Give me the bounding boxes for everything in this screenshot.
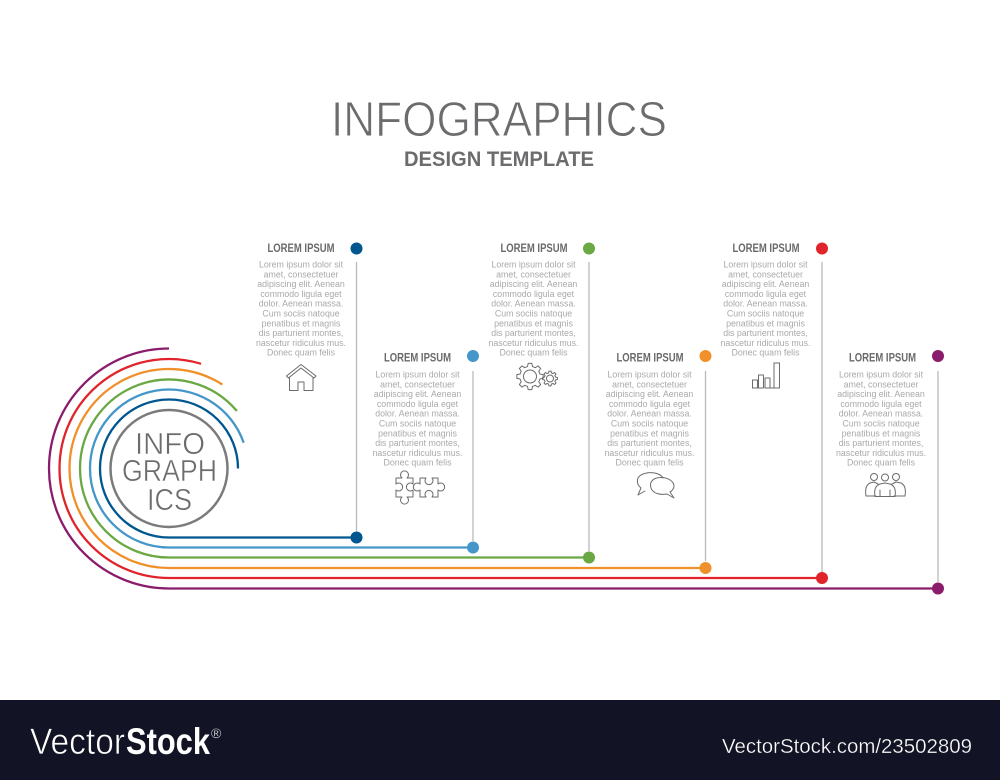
body text: Cum sociis natoque <box>379 418 456 428</box>
body text: amet, consectetuer <box>612 379 687 389</box>
body text: Donec quam felis <box>267 348 336 358</box>
connector <box>472 371 474 541</box>
heading: LOREM IPSUM <box>384 352 451 364</box>
body text: amet, consectetuer <box>496 269 571 279</box>
body text: commodo ligula eget <box>377 399 459 409</box>
marker bottom <box>700 562 712 574</box>
step 1 <box>256 242 362 544</box>
heading: LOREM IPSUM <box>849 352 916 364</box>
body text: commodo ligula eget <box>609 399 691 409</box>
body text: dolor. Aenean massa. <box>491 299 576 309</box>
body text: Lorem ipsum dolor sit <box>839 370 924 380</box>
connector <box>937 371 939 582</box>
body text: dolor. Aenean massa. <box>607 409 692 419</box>
watermark id: VectorStock.com/23502809 <box>722 735 972 758</box>
body text: Cum sociis natoque <box>842 418 920 428</box>
center badge <box>110 410 228 527</box>
connector <box>821 262 823 572</box>
body text: nascetur ridiculus mus. <box>256 338 346 348</box>
marker top <box>700 350 712 362</box>
icon: house <box>286 364 316 390</box>
marker top <box>932 350 944 362</box>
body text: adipiscing elit. Aenean <box>374 389 461 399</box>
body text: dis parturient montes, <box>839 438 923 448</box>
timeline line: green <box>80 380 589 558</box>
marker top <box>583 242 595 254</box>
watermark logo: Vector <box>30 721 125 762</box>
body text: Donec quam felis <box>384 458 452 468</box>
body text: Lorem ipsum dolor sit <box>723 260 808 270</box>
body text: adipiscing elit. Aenean <box>490 279 577 289</box>
step 3 <box>489 242 595 564</box>
body text: adipiscing elit. Aenean <box>606 389 693 399</box>
icon: bar chart <box>752 363 780 388</box>
body text: nascetur ridiculus mus. <box>373 448 462 458</box>
heading: LOREM IPSUM <box>500 243 568 255</box>
registered mark: ® <box>211 725 222 741</box>
body text: penatibus et magnis <box>378 428 457 438</box>
center badge: GRAPH <box>122 453 217 488</box>
body text: nascetur ridiculus mus. <box>489 338 578 348</box>
timeline line: blue <box>100 400 356 538</box>
marker top <box>816 242 828 254</box>
body text: commodo ligula eget <box>840 399 922 409</box>
body text: dis parturient montes, <box>375 438 460 448</box>
body text: dis parturient montes, <box>491 328 576 338</box>
body text: Lorem ipsum dolor sit <box>375 370 460 380</box>
body text: commodo ligula eget <box>260 289 342 299</box>
body text: amet, consectetuer <box>264 269 338 279</box>
body text: Cum sociis natoque <box>495 308 572 318</box>
body text: nascetur ridiculus mus. <box>836 448 926 458</box>
step 5 <box>721 242 828 584</box>
body text: adipiscing elit. Aenean <box>722 279 809 289</box>
body text: Lorem ipsum dolor sit <box>607 370 692 380</box>
timeline line: red <box>60 359 822 578</box>
body text: Donec quam felis <box>616 458 684 468</box>
footer bar <box>0 700 1000 780</box>
title: INFOGRAPHICS <box>331 93 667 147</box>
connector <box>588 262 590 551</box>
icon: people <box>866 474 905 496</box>
marker top <box>467 350 479 362</box>
body text: commodo ligula eget <box>493 289 575 299</box>
subtitle: DESIGN TEMPLATE <box>404 148 594 171</box>
step 6 <box>836 350 944 594</box>
marker bottom <box>816 572 828 584</box>
body text: dis parturient montes, <box>259 328 343 338</box>
body text: Cum sociis natoque <box>611 418 688 428</box>
timeline line: orange <box>70 369 706 568</box>
body text: amet, consectetuer <box>380 379 455 389</box>
body text: penatibus et magnis <box>610 428 689 438</box>
marker bottom <box>467 542 479 554</box>
body text: dolor. Aenean massa. <box>259 299 343 309</box>
body text: penatibus et magnis <box>262 318 341 328</box>
body text: nascetur ridiculus mus. <box>721 338 810 348</box>
body text: Donec quam felis <box>500 348 568 358</box>
heading: LOREM IPSUM <box>732 243 800 255</box>
icon: speech bubbles <box>637 473 674 498</box>
body text: amet, consectetuer <box>728 269 803 279</box>
timeline line: purple <box>49 348 938 588</box>
icon: gears <box>517 363 557 390</box>
body text: Cum sociis natoque <box>262 308 340 318</box>
body text: Lorem ipsum dolor sit <box>259 260 344 270</box>
body text: dolor. Aenean massa. <box>839 409 923 419</box>
watermark logo: Stock <box>126 721 210 762</box>
marker bottom <box>583 552 595 564</box>
body text: nascetur ridiculus mus. <box>605 448 694 458</box>
body text: adipiscing elit. Aenean <box>837 389 925 399</box>
step 4 <box>605 350 712 574</box>
marker bottom <box>350 532 362 544</box>
center badge: INFO <box>135 426 205 461</box>
body text: Lorem ipsum dolor sit <box>491 260 576 270</box>
center badge: ICS <box>147 482 192 517</box>
body text: commodo ligula eget <box>725 289 807 299</box>
body text: penatibus et magnis <box>726 318 805 328</box>
timeline line: light blue <box>90 390 473 548</box>
connector <box>356 262 358 531</box>
body text: dis parturient montes, <box>723 328 808 338</box>
icon: puzzle <box>396 471 445 504</box>
connector <box>704 371 706 561</box>
heading: LOREM IPSUM <box>616 352 684 364</box>
step 2 <box>373 350 479 554</box>
body text: dolor. Aenean massa. <box>375 409 460 419</box>
marker bottom <box>932 582 944 594</box>
body text: adipiscing elit. Aenean <box>257 279 345 289</box>
body text: penatibus et magnis <box>494 318 573 328</box>
heading: LOREM IPSUM <box>268 243 334 255</box>
body text: amet, consectetuer <box>844 379 918 389</box>
body text: Donec quam felis <box>732 348 800 358</box>
body text: Donec quam felis <box>847 458 916 468</box>
body text: dis parturient montes, <box>607 438 692 448</box>
body text: penatibus et magnis <box>842 428 921 438</box>
marker top <box>350 242 362 254</box>
body text: dolor. Aenean massa. <box>723 299 808 309</box>
body text: Cum sociis natoque <box>727 308 804 318</box>
